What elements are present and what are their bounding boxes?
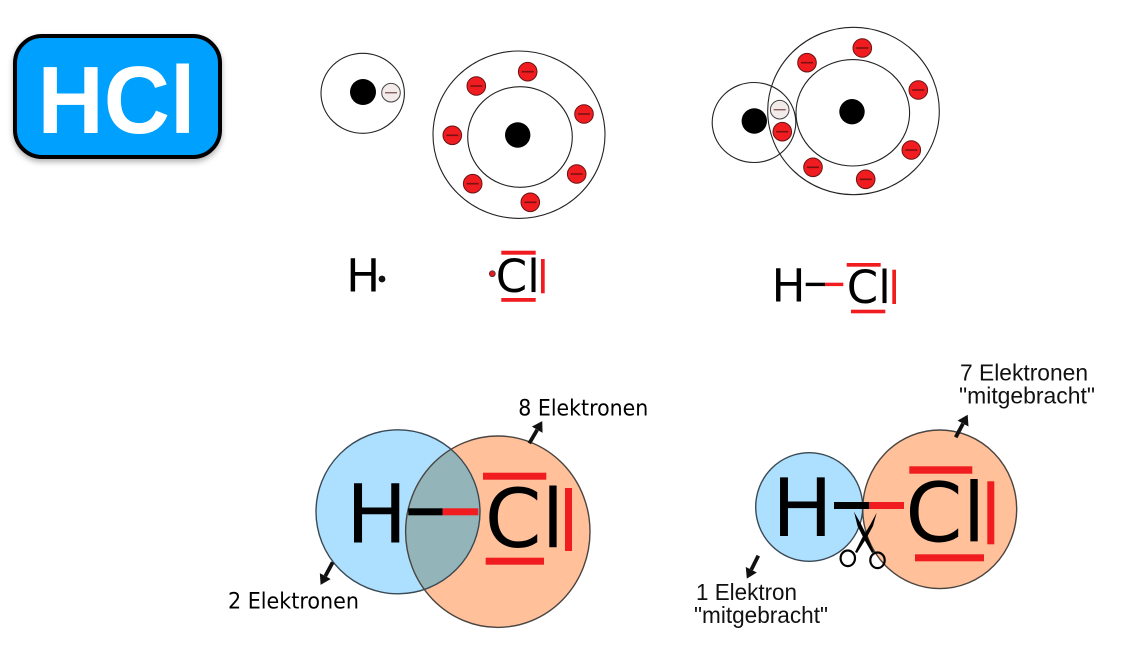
badge: HCl: HCl bbox=[38, 47, 196, 154]
label: 1 Elektron mitgebracht: 1 Elektron bbox=[696, 579, 797, 605]
label: 1 Elektron mitgebracht: "mitgebracht" bbox=[694, 602, 828, 628]
label: 7 Elektronen mitgebracht: "mitgebracht" bbox=[959, 382, 1095, 408]
diagram: shared electrons, overlapping circles bbox=[316, 430, 590, 627]
atom: chlorine separate bbox=[433, 51, 605, 218]
diagram: shared electrons, overlapping circles: H bbox=[346, 468, 407, 563]
Lewis formula: H-Cl: Cl bbox=[847, 261, 891, 314]
Lewis formula: H-Cl bbox=[772, 260, 896, 314]
label: 2 Elektronen: 2 Elektronen bbox=[228, 588, 359, 614]
arrow: to 8 Elektronen bbox=[529, 430, 537, 443]
atom: hydrogen separate bbox=[321, 53, 404, 133]
diagram: separated atoms bbox=[756, 430, 1017, 589]
label: 8 Elektronen: 8 Elektronen bbox=[518, 396, 648, 422]
arrow: to 7 Elektronen bbox=[956, 424, 963, 437]
arrow: to 1 Elektron bbox=[751, 556, 758, 570]
Lewis symbol: H with electron: H bbox=[346, 250, 380, 303]
diagram: separated atoms: Cl bbox=[905, 466, 985, 562]
molecule: overlapping hydrogen and chlorine atoms bbox=[712, 27, 939, 195]
label: 7 Elektronen mitgebracht bbox=[959, 360, 1095, 408]
diagram: separated atoms: H bbox=[772, 461, 833, 555]
Lewis symbol: Cl with electrons: Cl bbox=[496, 250, 540, 303]
icon: scissors bbox=[841, 512, 885, 568]
label: 7 Elektronen mitgebracht: 7 Elektronen bbox=[960, 360, 1088, 386]
label: 1 Elektron mitgebracht bbox=[694, 579, 828, 628]
Lewis formula: H-Cl: H bbox=[772, 260, 805, 313]
diagram: shared electrons, overlapping circles: Cl bbox=[485, 472, 564, 567]
arrow: to 2 Elektronen bbox=[325, 562, 333, 576]
